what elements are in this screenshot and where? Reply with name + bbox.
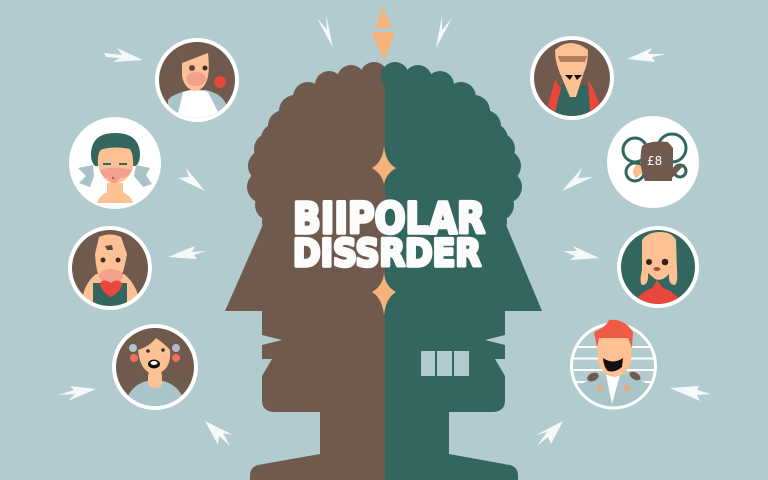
arrows around the head: [58, 14, 711, 446]
portrait 3: woman with red heart: [68, 226, 152, 310]
portrait 2: woman with green hair: [69, 117, 161, 209]
top orange diamond: [372, 7, 395, 61]
arrow: left 3: [168, 246, 206, 259]
portrait 4: worried woman: [112, 324, 198, 410]
portrait 7: long-haired figure in red: [617, 226, 699, 308]
arrow: right 1: [627, 48, 666, 62]
head: right green half: [381, 62, 542, 480]
upper sparkle: [372, 145, 396, 184]
arrow: right 5: [536, 421, 563, 446]
title: BIIPOLAR: [293, 194, 485, 244]
lower sparkle: [372, 273, 396, 315]
arrow: top right spark: [436, 16, 452, 48]
arrow: left 4: [58, 386, 96, 401]
arrow: left 1: [104, 48, 143, 62]
title: [293, 194, 485, 275]
portrait 6: white circle with brown mug: [607, 116, 699, 208]
arrow: left 2: [178, 168, 205, 191]
arrow: right 2: [562, 168, 593, 191]
head: left brown half: [225, 62, 388, 480]
portrait 1: woman with red earring: [155, 38, 240, 125]
arrow: left 5: [205, 421, 233, 446]
arrow: right 4: [670, 386, 711, 401]
portrait 8: red-haired man with beard: [570, 320, 657, 408]
title: DISSRDER: [293, 232, 481, 275]
portrait 5: man with red straps: [530, 36, 615, 121]
arrow: top left spark: [317, 14, 333, 48]
portrait 6: white circle with brown mug: £8: [647, 154, 662, 168]
arrow: right 3: [563, 246, 599, 260]
windows on the right face: [421, 351, 469, 376]
